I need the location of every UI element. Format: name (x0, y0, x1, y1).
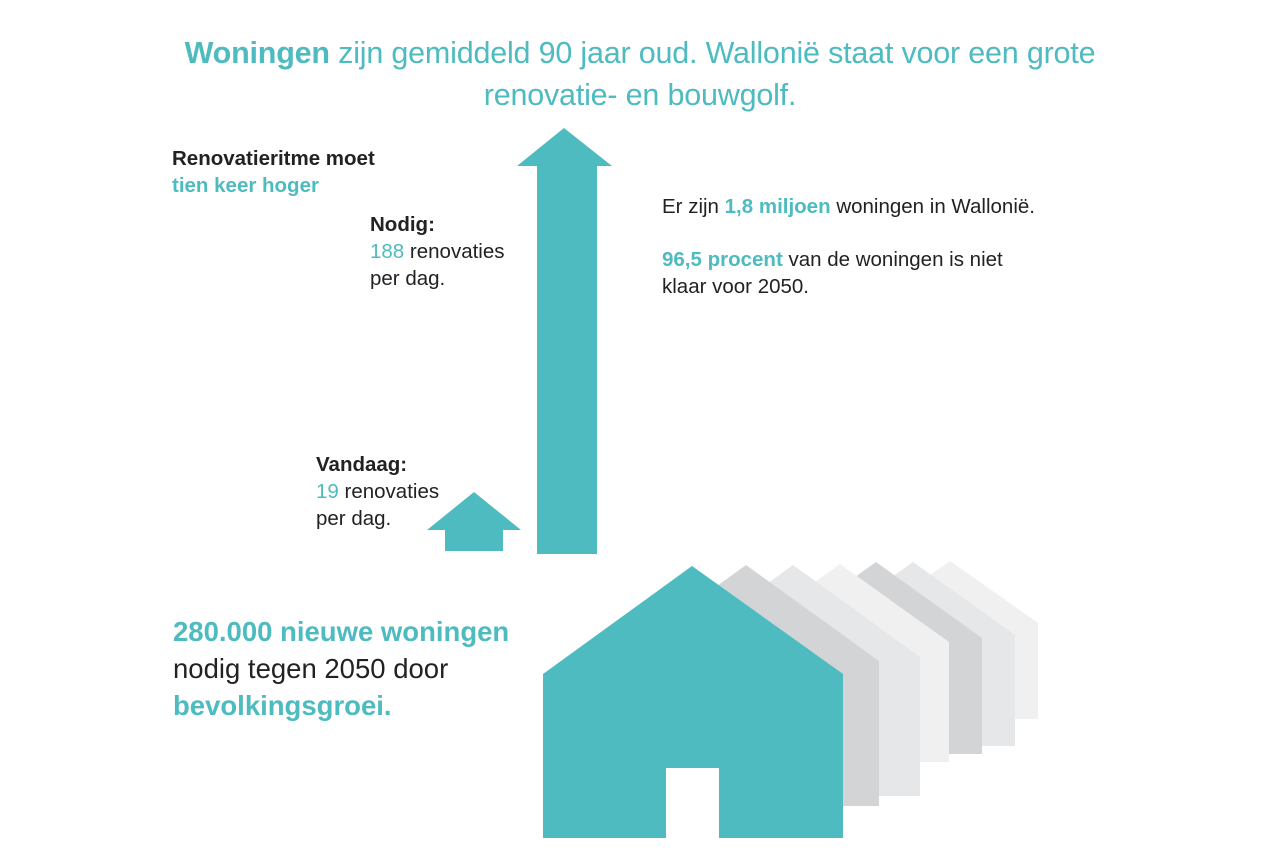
title: Woningen zijn gemiddeld 90 jaar oud. Wallonië staat voor een grote (185, 36, 1095, 70)
text: renovatieritme: tien keer hoger (172, 174, 319, 197)
text: renovatieritme: Renovatieritme moet (172, 147, 375, 170)
text: woningen facts: Er zijn 1,8 miljoen woningen in Wallonië. (662, 195, 1035, 218)
text: woningen facts (662, 195, 1035, 298)
houses group (543, 561, 1038, 838)
text: nieuwe woningen: bevolkingsgroei. (173, 690, 392, 721)
text: nieuwe woningen (173, 616, 509, 721)
text: nodig: per dag. (370, 267, 445, 290)
text: nieuwe woningen: 280.000 nieuwe woningen (173, 616, 509, 647)
text: vandaag: per dag. (316, 507, 391, 530)
text: woningen facts: 96,5 procent van de woningen is niet (662, 248, 1003, 271)
icon: small arrow (427, 492, 521, 551)
text: nodig (370, 213, 504, 290)
title (184, 36, 1095, 112)
text: renovatieritme (172, 147, 375, 197)
text: nieuwe woningen: nodig tegen 2050 door (173, 653, 448, 684)
title: renovatie- en bouwgolf. (484, 78, 796, 112)
text: woningen facts: klaar voor 2050. (662, 275, 809, 298)
text: vandaag: 19 renovaties (316, 480, 439, 503)
icon: big arrow (517, 128, 612, 554)
text: vandaag: Vandaag: (316, 453, 407, 476)
text: vandaag (316, 453, 439, 530)
text: nodig: Nodig: (370, 213, 435, 236)
text: nodig: 188 renovaties (370, 240, 504, 263)
